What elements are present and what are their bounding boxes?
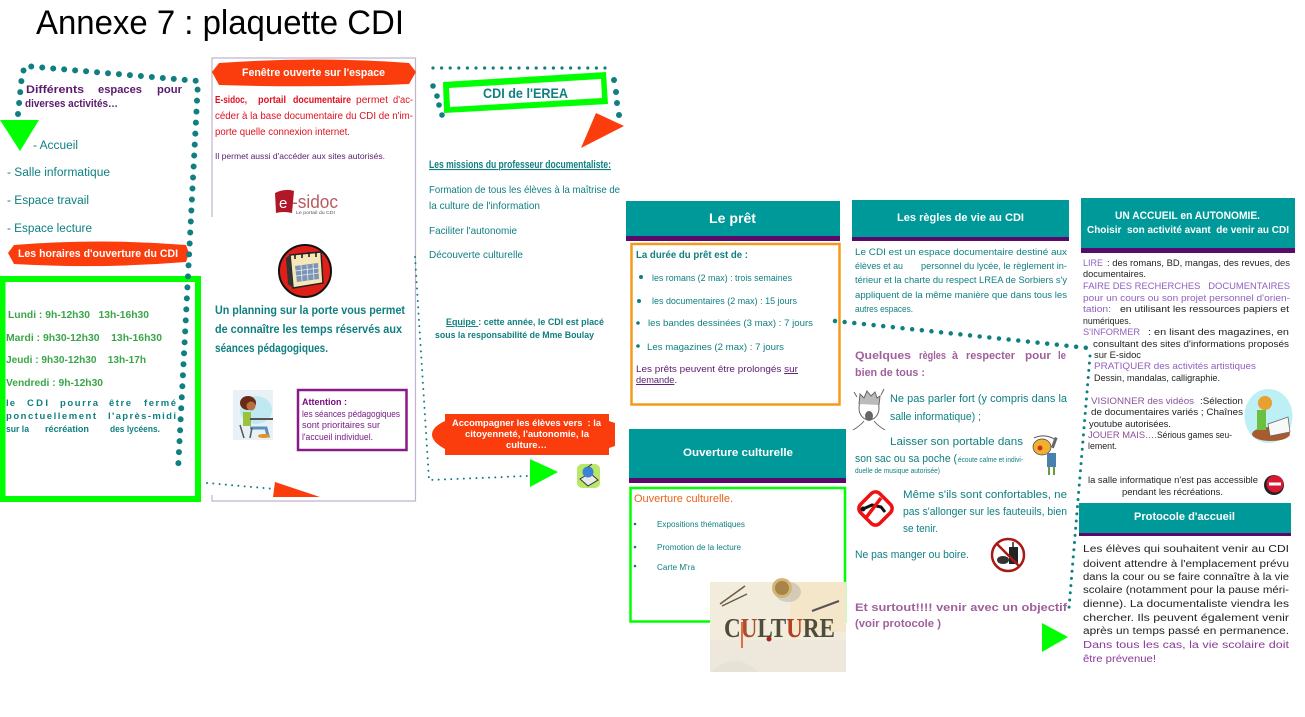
content box: les bandes dessinées (3 max) : 7 jours: [648, 318, 813, 329]
list of spaces: - Accueil: [33, 140, 78, 152]
banner: accompagner: [432, 414, 615, 455]
icon: student at desk: [233, 390, 273, 440]
header: [1081, 198, 1295, 253]
activities text: LIRE: [1083, 258, 1103, 268]
text: e-sidoc: portail: [258, 95, 286, 106]
heading: quelques règles: respecter: [966, 350, 1016, 362]
hours box: Jeudi : 9h30-12h30 13h-17h: [6, 354, 146, 366]
dotted line: left column: [18, 66, 198, 471]
content box: Les magazines (2 max) : 7 jours: [647, 342, 784, 353]
arrow: green triangle: [0, 120, 39, 151]
text: introduction: térieur et la charte du respect LREA de Sorbiers s'y: [855, 275, 1067, 286]
content box: les romans (2 max) : trois semaines: [652, 273, 792, 284]
header: Ouverture culturelle: [683, 447, 793, 459]
content box: [632, 244, 840, 404]
text: objectif: (voir protocole ): [855, 618, 941, 630]
text: planning: Un planning sur la porte vous permet: [215, 303, 405, 317]
text: rule 1: Ne pas parler fort (y compris dans la: [890, 393, 1068, 405]
activities text: consultant des sites d'informations proposés: [1093, 339, 1290, 349]
text: e-sidoc: céder à la base documentaire du CDI de n'im-: [215, 111, 413, 122]
panel: règles de vie: [852, 200, 1069, 652]
protocol text: [1083, 544, 1290, 665]
icon: person at computer: [1244, 389, 1292, 443]
text: introduction: élèves et au: [855, 261, 903, 272]
heading: quelques règles: [855, 350, 1066, 379]
text: objectif: Et surtout!!!! venir avec un objectif: [855, 602, 1067, 614]
text: salle informatique: pendant les récréations.: [1122, 487, 1223, 497]
activities text: documentaires.: [1083, 269, 1146, 279]
text: e-sidoc: porte quelle connexion internet.: [215, 127, 350, 138]
activities text: de documentaires variés ; Chaînes: [1091, 407, 1244, 417]
callout: attention: [298, 390, 406, 450]
list: missions: la culture de l'information: [429, 200, 540, 212]
text: rule 3: [903, 489, 1067, 535]
title: Annexe 7 : plaquette CDI: [36, 4, 404, 42]
protocol text: après un temps passé en permanence.: [1083, 626, 1289, 637]
panel: ouverture culturelle: [629, 429, 846, 672]
list: missions: Découverte culturelle: [429, 249, 523, 261]
text: planning: de connaître les temps réservés aux: [215, 322, 402, 336]
hours box: fermé: [144, 398, 176, 409]
content box: Ouverture culturelle.: [634, 493, 733, 505]
heading box: CDI de l'EREA: [443, 72, 608, 113]
header: Le prêt: [709, 210, 756, 226]
content box: La durée du prêt est de :: [636, 250, 748, 261]
activities text: numériques.: [1083, 316, 1131, 326]
activities text: lement.: [1088, 441, 1117, 451]
text: rule 1: salle informatique) ;: [890, 411, 981, 423]
text: équipe: sous la responsabilité de Mme Boulay: [435, 330, 595, 341]
text: équipe: Equipe : cette année, le CDI est placé: [446, 317, 604, 328]
activities text: : en lisant des magazines, en: [1148, 327, 1289, 337]
protocol text: Les élèves qui souhaitent venir au CDI: [1083, 544, 1289, 555]
heading: quelques règles: règles: [919, 350, 946, 362]
text: introduction: autres espaces.: [855, 304, 913, 315]
hours box: le: [6, 398, 15, 409]
dotted line: to green arrow: [415, 257, 528, 480]
header: [626, 201, 840, 241]
hours box: l'après-midi: [108, 411, 176, 422]
text: rule 2: son sac ou sa poche (: [855, 453, 957, 465]
arrow: orange triangle: [273, 482, 320, 497]
text: salle informatique: la salle informatique n'est pas accessible: [1088, 475, 1258, 485]
text: e-sidoc: documentaire: [293, 95, 351, 106]
activities text: [1083, 258, 1291, 451]
icon: no lying down: [856, 489, 895, 528]
icon: e-sidoc logo: e: [279, 195, 287, 212]
text: introduction: Le CDI est un espace documentaire destiné aux: [855, 247, 1067, 258]
list of spaces: - Salle informatique: [7, 167, 110, 179]
hours box: [2, 279, 198, 499]
banner: horaires: Les horaires d'ouverture du CDI: [18, 248, 178, 260]
icon: child with phone: [1033, 436, 1058, 475]
icon: no food: [992, 539, 1024, 571]
dotted line: to orange arrow: [207, 483, 275, 489]
header: Choisir son activité avant de venir au CDI: [1087, 225, 1289, 236]
callout: attention: Attention :: [302, 397, 347, 407]
activities text: FAIRE DES RECHERCHES DOCUMENTAIRES: [1083, 281, 1290, 291]
callout: attention: sont prioritaires sur: [302, 420, 380, 430]
activities text: Dessin, mandalas, calligraphie.: [1094, 373, 1220, 383]
text: équipe: [435, 317, 604, 341]
header: Les règles de vie au CDI: [897, 212, 1024, 224]
list: missions: Faciliter l'autonomie: [429, 225, 517, 237]
header: [629, 429, 846, 483]
banner: accompagner: culture…: [506, 440, 547, 451]
panel: accueil en autonomie: [1081, 198, 1295, 497]
dotted line: right connector: [835, 321, 1090, 608]
heading: quelques règles: pour: [1025, 350, 1052, 362]
text: planning: séances pédagogiques.: [215, 341, 328, 355]
list of spaces: [7, 140, 110, 235]
panel: fenêtre ouverte sur l'espace: [207, 58, 416, 501]
arrow: green triangle: [530, 459, 558, 487]
content box: Les prêts peuvent être prolongés sur: [636, 364, 798, 375]
heading: différents espaces: [25, 84, 183, 110]
icon: e-sidoc logo: Le portail du CDI: [296, 210, 335, 215]
banner: accompagner: citoyenneté, l'autonomie, la: [465, 429, 590, 440]
hours box: sur la: [6, 424, 30, 434]
heading: quelques règles: bien de tous :: [855, 367, 925, 379]
panel border: [212, 58, 416, 501]
text: rule 4: Ne pas manger ou boire.: [855, 549, 969, 561]
text: rule 2: écoute calme et indivi-: [958, 457, 1024, 464]
text: introduction: appliquent de la même manière que dans tous les: [855, 290, 1067, 301]
icon: computer on book: [577, 464, 600, 488]
content box: Carte M'ra: [657, 563, 696, 572]
protocol text: être prévenue!: [1083, 654, 1156, 665]
list of spaces: - Espace travail: [7, 195, 89, 207]
content box: Expositions thématiques: [657, 520, 745, 529]
hours box: être: [109, 398, 131, 409]
activities text: tation:: [1083, 304, 1111, 314]
panel: espaces et horaires: [0, 66, 198, 499]
heading: différents espaces: Différents: [26, 84, 84, 96]
activities text: youtube autorisées.: [1089, 419, 1171, 429]
heading: différents espaces: pour: [157, 84, 183, 96]
protocol text: doivent attendre à l'emplacement prévu: [1083, 559, 1289, 570]
text: rule 3: se tenir.: [903, 523, 938, 535]
header: [1079, 503, 1291, 536]
protocol text: Dans tous les cas, la vie scolaire doit: [1083, 640, 1289, 651]
panel: protocole d'accueil: [1079, 503, 1291, 665]
activities text: JOUER MAIS….: [1088, 430, 1157, 440]
text: rule 3: pas s'allonger sur les fauteuils, bien: [903, 506, 1067, 518]
image: culture: CULTURE: [724, 613, 835, 643]
text: objectif: [855, 602, 1067, 630]
callout: attention: les séances pédagogiques: [302, 409, 400, 419]
hours box: Vendredi : 9h-12h30: [6, 377, 103, 389]
text: e-sidoc: permet: [356, 95, 388, 106]
hours box: Lundi : 9h-12h30 13h-16h30: [8, 309, 149, 321]
icon: e-sidoc logo: -sidoc: [292, 192, 338, 212]
protocol text: chercher. Ils peuvent également venir: [1083, 613, 1290, 624]
icon: no entry: [1264, 475, 1284, 495]
callout: attention: l'accueil individuel.: [302, 432, 373, 442]
header: UN ACCUEIL en AUTONOMIE.: [1115, 210, 1260, 222]
heading: quelques règles: le: [1058, 350, 1066, 362]
activities text: en utilisant les ressources papiers et: [1120, 304, 1290, 314]
text: introduction: personnel du lycée, le règlement in-: [921, 261, 1067, 272]
text: rule 1: [890, 393, 1068, 423]
content box: les documentaires (2 max) : 15 jours: [652, 296, 797, 307]
list of spaces: - Espace lecture: [7, 223, 92, 235]
dotted frame: [430, 68, 622, 118]
activities text: S'INFORMER: [1083, 327, 1141, 337]
activities text: :Sélection: [1200, 396, 1243, 406]
hours box: récréation: [45, 424, 89, 434]
text: e-sidoc: d'ac-: [393, 95, 413, 106]
panel: le prêt: [626, 201, 840, 404]
heading box: CDI de l'EREA: CDI de l'EREA: [483, 85, 568, 101]
arrow: green triangle: [1042, 623, 1068, 652]
text: salle informatique: [1088, 475, 1258, 497]
hours box: CDI: [27, 398, 48, 409]
text: rule 2: Laisser son portable dans: [890, 436, 1024, 448]
panel: CDI de l'EREA: [415, 68, 624, 488]
list: missions: [429, 184, 620, 261]
activities text: sur E-sidoc: [1094, 350, 1142, 360]
protocol text: dienne). La documentaliste viendra les: [1083, 599, 1289, 610]
hours box: Mardi : 9h30-12h30 13h-16h30: [6, 332, 162, 344]
text: planning: [215, 303, 405, 355]
protocol text: dans la cour ou se faire connaître à la vie: [1083, 572, 1289, 583]
hours box: pourra: [60, 398, 99, 409]
content box: demande.: [636, 375, 677, 386]
text: rule 2: duelle de musique autorisée): [855, 468, 940, 475]
content box: Promotion de la lecture: [657, 543, 742, 552]
header: [852, 200, 1069, 241]
heading: quelques règles: Quelques: [855, 350, 911, 362]
image: culture: [710, 578, 846, 672]
activities text: : des romans, BD, mangas, des revues, des: [1107, 258, 1291, 268]
banner: horaires: [8, 242, 189, 266]
activities text: PRATIQUER des activités artistiques: [1094, 361, 1257, 371]
text: sites autorisés: Il permet aussi d'accéder aux sites autorisés.: [215, 151, 385, 161]
text: e-sidoc: [215, 95, 413, 138]
heading: différents espaces: espaces: [98, 84, 142, 96]
banner: fenêtre ouverte: Fenêtre ouverte sur l'espace: [242, 67, 385, 79]
icon: calendar: [279, 245, 331, 297]
activities text: Sérious games seu-: [1157, 430, 1232, 440]
heading: quelques règles: à: [952, 350, 959, 362]
text: rule 2: [855, 436, 1024, 475]
text: rule 3: Même s'ils sont confortables, ne: [903, 489, 1067, 501]
arrow: orange triangle: [581, 113, 624, 148]
activities text: VISIONNER des vidéos: [1091, 396, 1195, 406]
icon: shouting face: [853, 389, 885, 430]
hours box: ponctuellement: [6, 411, 97, 422]
protocol text: scolaire (notamment pour la pause méri-: [1083, 585, 1289, 596]
text: introduction: [855, 247, 1067, 315]
content box: [630, 488, 845, 622]
activities text: pour un cours ou son projet personnel d'orien-: [1083, 293, 1290, 303]
header: Protocole d'accueil: [1134, 511, 1235, 523]
banner: fenêtre ouverte: [212, 60, 416, 86]
list: missions: Formation de tous les élèves à la maîtrise de: [429, 184, 620, 196]
heading: différents espaces: diverses activités…: [25, 98, 118, 110]
hours box: des lycéens.: [110, 424, 160, 434]
banner: accompagner: Accompagner les élèves vers : la: [452, 418, 602, 429]
heading: missions: Les missions du professeur documentaliste:: [429, 159, 611, 171]
text: e-sidoc: E-sidoc,: [215, 95, 247, 106]
icon: e-sidoc logo: [275, 190, 338, 215]
